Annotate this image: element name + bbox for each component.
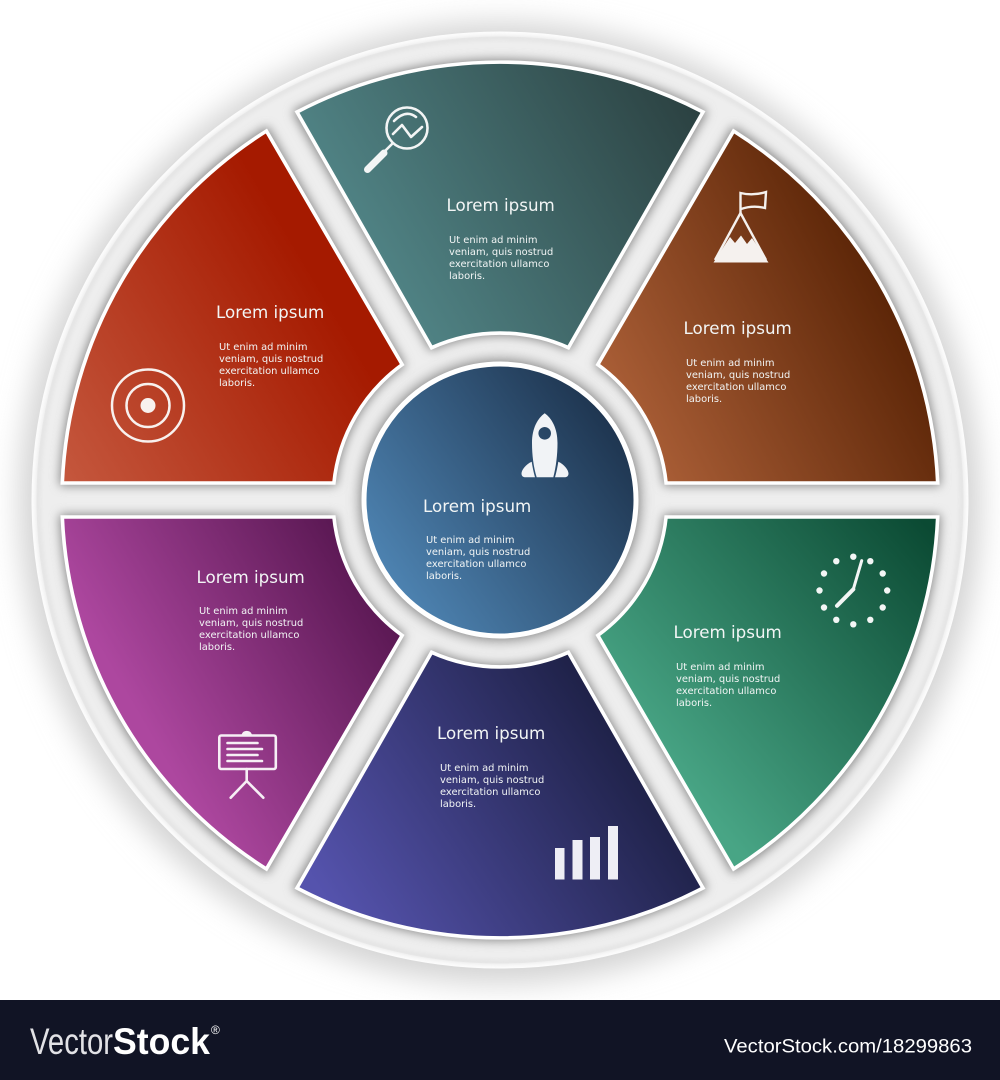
text block: veniam, quis nostrud: [440, 775, 544, 786]
heading: Lorem ipsum: [437, 723, 545, 743]
icon: rocket: [522, 413, 568, 477]
icon: presentation board: [219, 732, 276, 798]
text block: exercitation ullamco: [440, 787, 540, 798]
text block: Ut enim ad minim: [676, 662, 765, 673]
segment shadows: [62, 62, 938, 938]
panel: green segment: [598, 517, 938, 869]
heading: Lorem ipsum: [216, 302, 324, 322]
text block: laboris.: [449, 271, 485, 282]
icon: magnifier with chart: [368, 108, 428, 170]
panel: navy segment: [297, 652, 703, 938]
text block: Ut enim ad minim: [426, 535, 515, 546]
icon: mountain with flag: [714, 192, 768, 262]
text block: veniam, quis nostrud: [686, 370, 790, 381]
heading: Lorem ipsum: [196, 567, 305, 587]
text block: exercitation ullamco: [449, 259, 549, 270]
panel: orange segment: [598, 131, 938, 483]
icon: bar chart: [555, 826, 618, 880]
panel: centre circle: [364, 364, 636, 636]
text block: exercitation ullamco: [676, 686, 776, 697]
panel: top teal segment: [297, 62, 703, 348]
icon: target: [112, 370, 184, 442]
panel: red segment: [62, 131, 402, 483]
icon: clock: [816, 554, 890, 628]
text block: laboris.: [686, 394, 722, 405]
text block: Ut enim ad minim: [686, 358, 775, 369]
centre circle shadow: [361, 361, 639, 639]
heading: Lorem ipsum: [684, 318, 792, 338]
text block: laboris.: [440, 799, 476, 810]
heading: Lorem ipsum: [446, 195, 555, 215]
text block: Ut enim ad minim: [440, 763, 529, 774]
text block: exercitation ullamco: [219, 366, 319, 377]
text block: veniam, quis nostrud: [219, 354, 323, 365]
logo wordmark: ®: [211, 1023, 220, 1037]
text block: exercitation ullamco: [199, 630, 299, 641]
text block: Ut enim ad minim: [449, 235, 538, 246]
text block: veniam, quis nostrud: [676, 674, 780, 685]
text block: Ut enim ad minim: [199, 606, 288, 617]
footer bar: [0, 1000, 1000, 1080]
logo wordmark: Vector: [30, 1021, 113, 1062]
text block: veniam, quis nostrud: [199, 618, 303, 629]
text block: laboris.: [676, 698, 712, 709]
text block: veniam, quis nostrud: [426, 547, 530, 558]
heading: Lorem ipsum: [423, 496, 531, 516]
text block: veniam, quis nostrud: [449, 247, 553, 258]
panel: purple segment: [62, 517, 402, 869]
text block: exercitation ullamco: [426, 559, 526, 570]
text block: exercitation ullamco: [686, 382, 786, 393]
logo wordmark: Stock: [113, 1021, 210, 1062]
text block: laboris.: [199, 642, 235, 653]
heading: Lorem ipsum: [674, 622, 782, 642]
text block: laboris.: [426, 571, 462, 582]
text block: laboris.: [219, 378, 255, 389]
image id: VectorStock.com/18299863: [724, 1036, 972, 1058]
text block: Ut enim ad minim: [219, 342, 308, 353]
